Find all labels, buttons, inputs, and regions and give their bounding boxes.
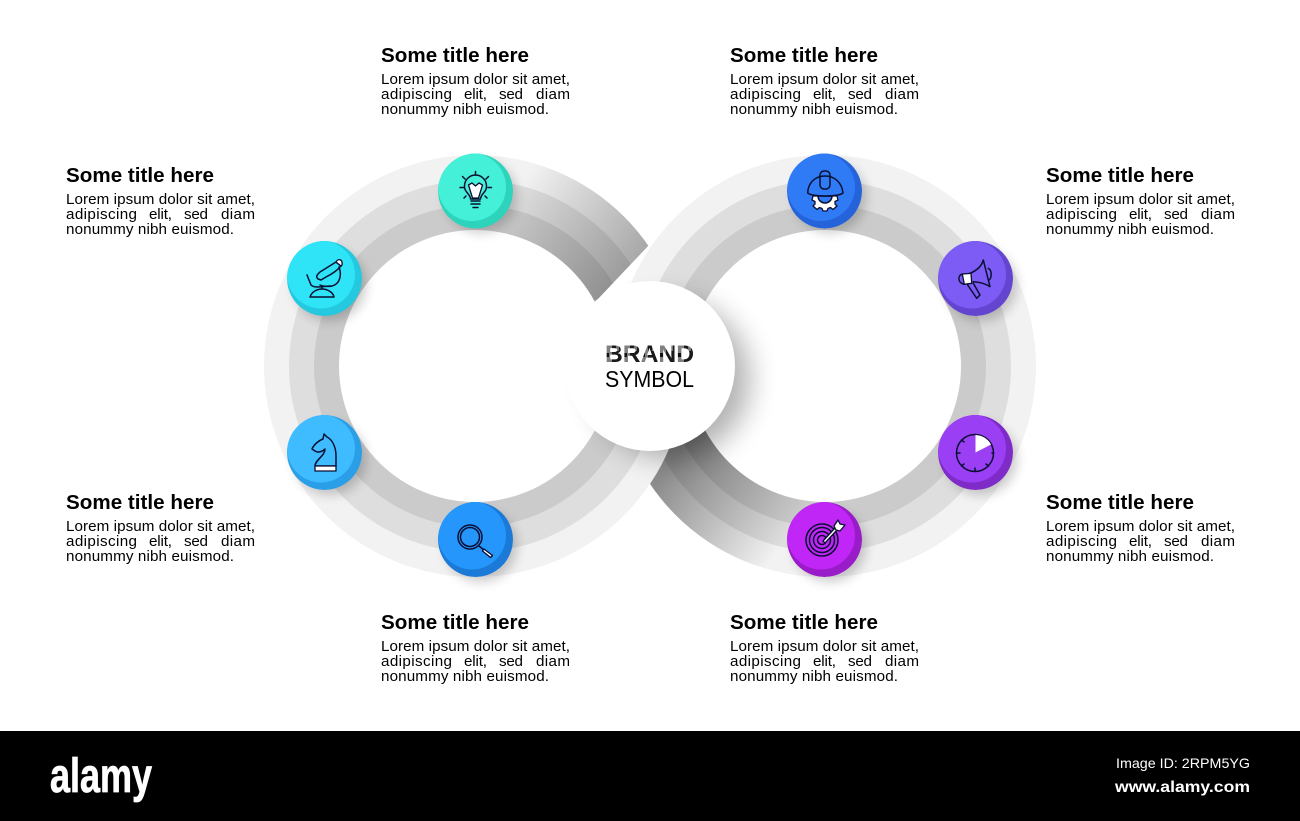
text block: bottom right: sed <box>848 653 872 670</box>
text block: upper far right: Some title here <box>1046 164 1194 187</box>
text block: top right: Lorem ipsum dolor sit amet, <box>730 71 919 88</box>
text block: bottom left: adipiscing <box>381 653 452 670</box>
text block: upper far right: adipiscing <box>1046 206 1117 223</box>
text block: top left: Lorem ipsum dolor sit amet, <box>381 71 570 88</box>
text block: lower far right <box>1046 491 1235 565</box>
text block: top right: adipiscing <box>730 86 801 103</box>
icon: helmet and gear <box>808 171 843 211</box>
text block: bottom right: elit, <box>813 653 836 670</box>
text block: top right: diam <box>885 86 919 103</box>
text block: lower far left: nonummy nibh euismod. <box>66 548 234 565</box>
text block: upper far right: sed <box>1164 206 1188 223</box>
text block: top right: elit, <box>813 86 836 103</box>
node: target <box>787 502 866 582</box>
node: chess knight <box>287 414 366 495</box>
text block: top left: diam <box>536 86 570 103</box>
text block: upper far left: diam <box>221 206 255 223</box>
text block: top left: nonummy nibh euismod. <box>381 101 549 118</box>
center brand circle <box>565 281 750 458</box>
brand text <box>605 341 694 392</box>
text block: top left: adipiscing <box>381 86 452 103</box>
text block: top right <box>730 44 919 118</box>
text block: lower far right: elit, <box>1129 533 1152 550</box>
text block: upper far right: elit, <box>1129 206 1152 223</box>
text block: upper far left: Some title here <box>66 164 214 187</box>
text block: bottom right: diam <box>885 653 919 670</box>
brand text: SYMBOL <box>605 366 694 392</box>
text block: lower far right: sed <box>1164 533 1188 550</box>
text block: lower far right: Some title here <box>1046 491 1194 514</box>
text block: upper far right <box>1046 164 1235 238</box>
text block: upper far left: nonummy nibh euismod. <box>66 221 234 238</box>
text block: bottom right: nonummy nibh euismod. <box>730 668 898 685</box>
text block: top right: sed <box>848 86 872 103</box>
icon: target <box>806 520 845 556</box>
text block: top right: nonummy nibh euismod. <box>730 101 898 118</box>
footer logo: alamy <box>50 750 152 803</box>
text block: bottom left: diam <box>536 653 570 670</box>
text block: lower far right: nonummy nibh euismod. <box>1046 548 1214 565</box>
text block: bottom left: Lorem ipsum dolor sit amet, <box>381 638 570 655</box>
text block: bottom right: adipiscing <box>730 653 801 670</box>
icon: clock <box>956 434 994 472</box>
node: helmet and gear <box>787 153 866 233</box>
text block: lower far left: adipiscing <box>66 533 137 550</box>
node: magnifier <box>438 502 517 582</box>
text block: top left <box>381 44 570 118</box>
text block: lower far left: Some title here <box>66 491 214 514</box>
text block: lower far left: sed <box>184 533 208 550</box>
text block: bottom right: Lorem ipsum dolor sit amet, <box>730 638 919 655</box>
text block: upper far right: nonummy nibh euismod. <box>1046 221 1214 238</box>
text block: bottom left: sed <box>499 653 523 670</box>
text block: top left: sed <box>499 86 523 103</box>
text block: bottom left: nonummy nibh euismod. <box>381 668 549 685</box>
text block: bottom left <box>381 611 570 685</box>
brand text: BRAND <box>605 341 694 368</box>
text block: lower far right: Lorem ipsum dolor sit amet, <box>1046 518 1235 535</box>
text block: upper far right: diam <box>1201 206 1235 223</box>
text block: bottom right <box>730 611 919 685</box>
footer band <box>0 731 1300 821</box>
text block: top right: Some title here <box>730 44 878 67</box>
icon: megaphone <box>959 260 991 298</box>
text block: lower far right: diam <box>1201 533 1235 550</box>
icon: microscope <box>307 260 342 297</box>
text block: bottom left: Some title here <box>381 611 529 634</box>
node: clock <box>938 414 1017 495</box>
node: lightbulb <box>438 153 517 233</box>
text block: top left: Some title here <box>381 44 529 67</box>
icon: magnifier <box>458 525 492 558</box>
footer image id: Image ID: 2RPM5YG <box>1116 755 1250 771</box>
left ring <box>264 155 686 577</box>
text block: upper far left: elit, <box>149 206 172 223</box>
text block: upper far right: Lorem ipsum dolor sit amet, <box>1046 191 1235 208</box>
text block: upper far left <box>66 164 255 238</box>
text block: upper far left: sed <box>184 206 208 223</box>
icon: chess knight <box>312 434 336 471</box>
text block: lower far left: diam <box>221 533 255 550</box>
text block: lower far left: elit, <box>149 533 172 550</box>
text block: top left: elit, <box>464 86 487 103</box>
text block: upper far left: Lorem ipsum dolor sit amet, <box>66 191 255 208</box>
text block: upper far left: adipiscing <box>66 206 137 223</box>
icon: lightbulb <box>460 172 492 208</box>
node: megaphone <box>938 240 1017 321</box>
text block: lower far left: Lorem ipsum dolor sit amet, <box>66 518 255 535</box>
text block: bottom left: elit, <box>464 653 487 670</box>
text block: lower far left <box>66 491 255 565</box>
text block: bottom right: Some title here <box>730 611 878 634</box>
footer url: www.alamy.com <box>1114 779 1250 796</box>
right ring <box>614 155 1036 577</box>
text block: lower far right: adipiscing <box>1046 533 1117 550</box>
node: microscope <box>287 240 366 321</box>
